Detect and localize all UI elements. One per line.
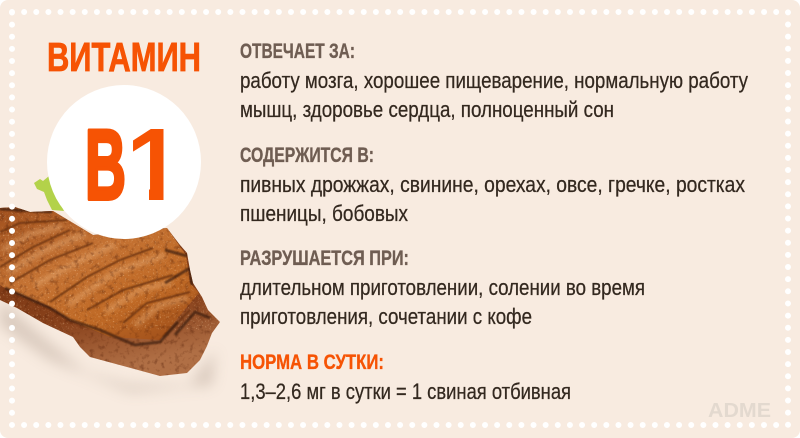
- charred edges: [0, 209, 210, 345]
- section: responsible for: мышц, здоровье сердца, полноценный сон: [240, 97, 614, 122]
- steak side: [0, 200, 225, 380]
- circle badge: B1: [47, 85, 201, 239]
- section: daily norm: 1,3–2,6 мг в сутки = 1 свиная отбивная: [240, 379, 571, 404]
- lettuce: [34, 176, 64, 211]
- light specks: [0, 200, 225, 330]
- steak body: [0, 200, 225, 380]
- section: contained in: СОДЕРЖИТСЯ В:: [240, 144, 374, 167]
- illustration: steak with lettuce: [0, 176, 225, 392]
- circle badge: B1: 1: [126, 107, 183, 222]
- watermark: ADME: [708, 400, 771, 422]
- dark texture: [0, 208, 214, 376]
- section: contained in: [240, 144, 745, 226]
- grill marks: [0, 220, 190, 337]
- circle badge: B1: B: [85, 109, 126, 220]
- section: destroyed by: приготовления, сочетании с кофе: [240, 304, 532, 329]
- section: responsible for: ОТВЕЧАЕТ ЗА:: [240, 40, 355, 63]
- steak top surface: [0, 207, 199, 340]
- section: contained in: пшеницы, бобовых: [240, 201, 408, 226]
- section: destroyed by: длительном приготовлении, солении во время: [240, 275, 645, 300]
- steak shadow: [0, 300, 215, 392]
- section: daily norm: НОРМА В СУТКИ:: [240, 351, 384, 374]
- section: responsible for: [240, 40, 748, 122]
- section: contained in: пивных дрожжах, свинине, орехах, овсе, гречке, ростках: [240, 172, 745, 197]
- light glaze bands: [3, 226, 188, 325]
- section: destroyed by: [240, 247, 645, 329]
- section: destroyed by: РАЗРУШАЕТСЯ ПРИ:: [240, 247, 409, 270]
- title: ВИТАМИН: [47, 34, 201, 80]
- section: daily norm: [240, 351, 571, 404]
